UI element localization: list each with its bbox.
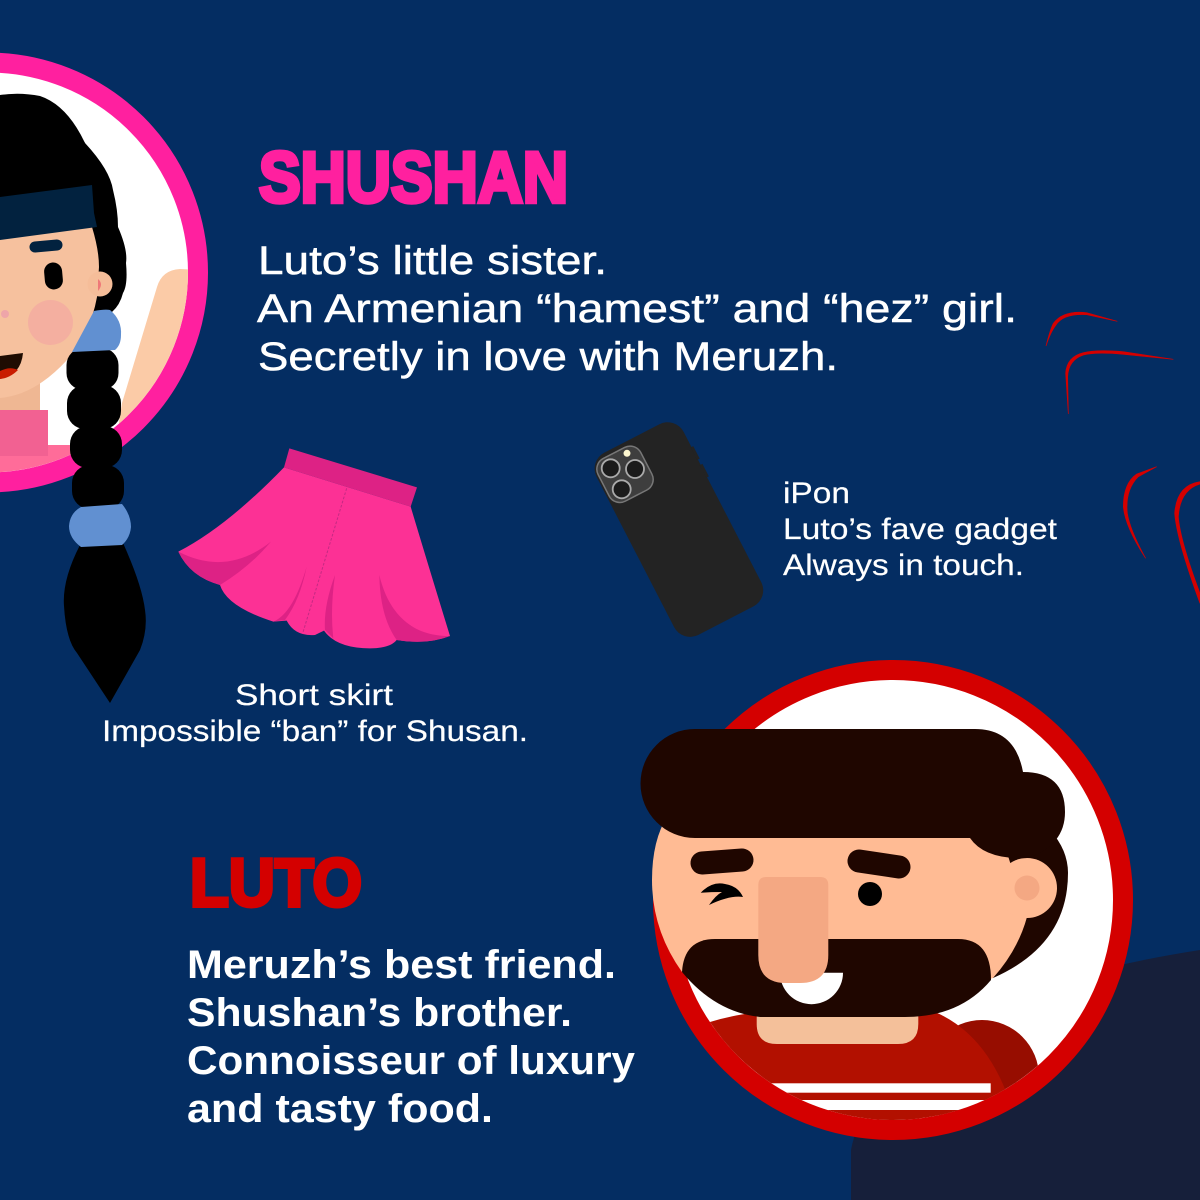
title: Luto: LUTO [190, 845, 362, 921]
cheek [28, 300, 73, 345]
braid tip [64, 543, 146, 703]
caption: phone: Always in touch. [783, 549, 1024, 582]
ear [88, 272, 112, 296]
open eye [858, 882, 882, 906]
hair tie upper [72, 310, 121, 352]
red ring [663, 670, 1123, 1130]
text block: Luto description: Meruzh’s best friend. [187, 943, 616, 987]
headband [0, 185, 97, 240]
moustache [682, 939, 991, 1017]
caption: skirt: Impossible “ban” for Shusan. [102, 715, 528, 748]
text block: Shushan description: An Armenian “hamest” and “hez” girl. [257, 287, 1017, 331]
caption: phone: Luto’s fave gadget [783, 513, 1058, 546]
hair [640, 729, 1065, 858]
dark background blob [851, 950, 1200, 1200]
portrait: Shushan [0, 62, 200, 703]
text block: Shushan description: Secretly in love with Meruzh. [258, 335, 838, 379]
caption: phone: iPon [783, 477, 850, 510]
text block: Luto description: Connoisseur of luxury [187, 1039, 636, 1083]
back hair [0, 95, 127, 340]
text block: Luto description [187, 943, 636, 1131]
braid [64, 348, 146, 703]
caption: skirt [102, 679, 528, 748]
winking eye [701, 883, 743, 905]
nose dot [1, 310, 9, 318]
face [0, 227, 99, 398]
shirt [710, 1013, 1038, 1120]
ear [997, 858, 1057, 918]
text block: Shushan description: Luto’s little sister. [258, 239, 607, 283]
red decorative swirls [1046, 312, 1200, 603]
teeth [780, 973, 843, 1004]
neck [757, 1010, 918, 1044]
hair tie lower [69, 504, 131, 547]
icon: phone [588, 415, 771, 643]
portrait: Luto [640, 670, 1123, 1140]
back hair [960, 800, 1068, 978]
text block: Shushan description [257, 239, 1017, 379]
clothes and arm [0, 269, 188, 472]
text block: Luto description: Shushan’s brother. [187, 991, 572, 1035]
caption: skirt: Short skirt [235, 679, 394, 712]
mouth [0, 353, 23, 379]
title: Shushan: SHUSHAN [259, 139, 568, 218]
text block: Luto description: and tasty food. [187, 1087, 493, 1131]
hair fringe [0, 94, 92, 200]
eyebrows [702, 860, 899, 867]
pink ring [0, 62, 198, 482]
caption: phone [783, 477, 1058, 582]
eyebrow [35, 245, 57, 247]
nose [758, 877, 828, 983]
face [652, 815, 1027, 1010]
icon: skirt [178, 448, 450, 648]
eye [43, 262, 64, 290]
